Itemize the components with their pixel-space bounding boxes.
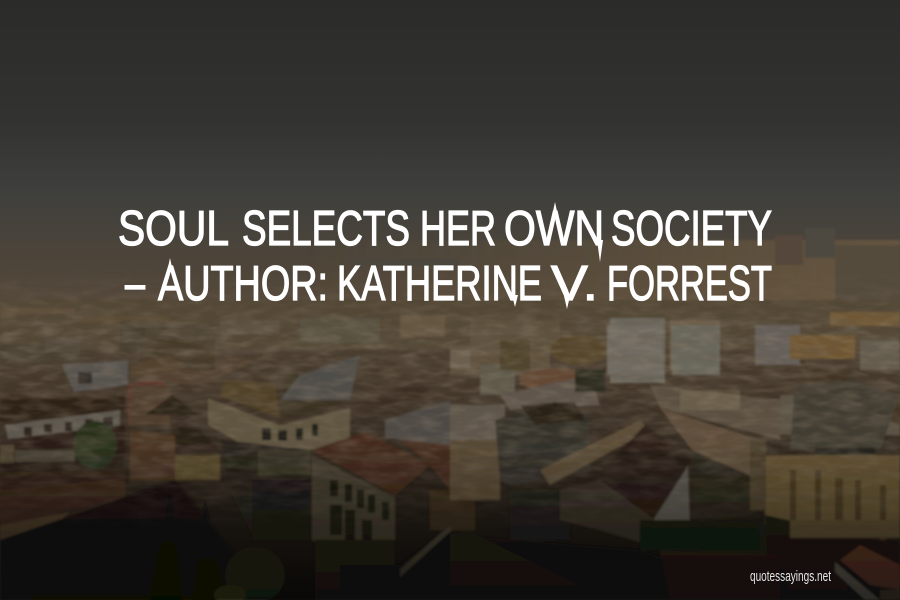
left white houses: [0, 338, 260, 540]
quote line 1: SELECTS: [242, 202, 410, 256]
photo: rooftops of the city: [0, 228, 900, 600]
author line: –: [125, 257, 146, 311]
author line: AUTHOR:: [158, 257, 328, 311]
quote line 1: HER: [420, 202, 496, 256]
distant rooftops band: [0, 228, 900, 383]
watermark: quotessayings.net: [750, 568, 832, 585]
dark foreground left: [0, 480, 452, 600]
bottom shade: [0, 440, 900, 600]
right foreground roofs: [450, 520, 900, 600]
right terrace and yellow towers: [750, 360, 900, 600]
quote title: [118, 202, 772, 311]
author line: FORREST: [607, 257, 772, 311]
centre-left small roofs: [130, 340, 220, 480]
centre-right building blocks: [450, 325, 720, 540]
author line: V.: [551, 257, 598, 311]
quote line 1: [118, 202, 772, 262]
corner building: [208, 355, 475, 585]
quote line 1: SOCIETY: [611, 202, 772, 256]
author line: [125, 257, 772, 311]
quote line 1: SOUL: [118, 202, 229, 256]
large dark roof block and sandy wall: [560, 385, 790, 560]
quote line 1: OWN: [504, 202, 604, 256]
photo texture: [0, 296, 900, 512]
author line: KATHERINE: [337, 257, 542, 311]
